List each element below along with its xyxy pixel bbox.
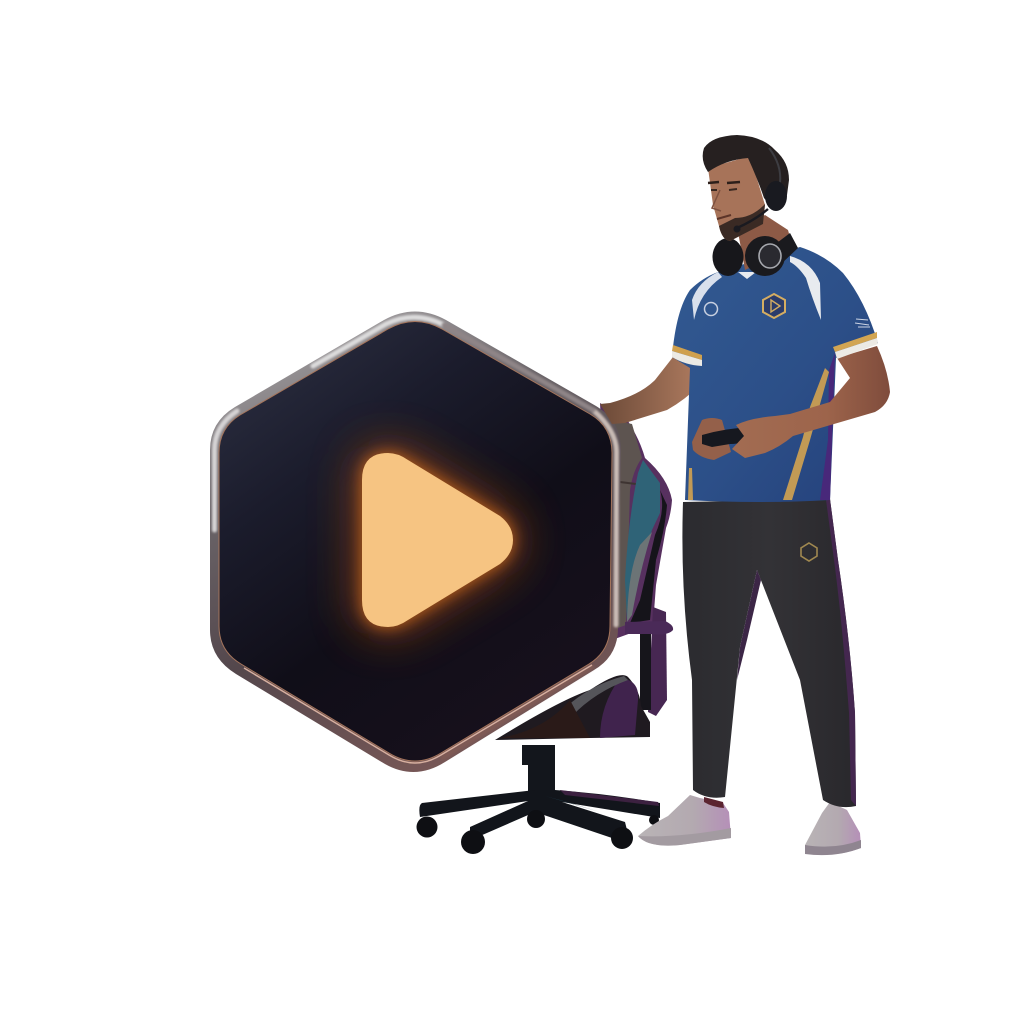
shoulder stripes xyxy=(790,256,821,320)
badge rim xyxy=(210,312,621,772)
neck headphones xyxy=(712,233,798,276)
chair base xyxy=(419,790,660,838)
copper lower edge xyxy=(244,665,592,763)
play glow xyxy=(362,453,513,627)
controller xyxy=(702,427,756,447)
chair arm support xyxy=(640,634,651,710)
chair wheels xyxy=(416,810,659,854)
badge play xyxy=(771,300,780,312)
face xyxy=(708,156,765,241)
gamer xyxy=(600,135,890,855)
back arm xyxy=(600,357,702,424)
shoes xyxy=(638,795,861,855)
badge face xyxy=(219,322,612,761)
trousers xyxy=(682,499,856,807)
rim highlights xyxy=(214,317,616,758)
trouser logo xyxy=(801,543,817,561)
chair back xyxy=(600,403,672,640)
collar V xyxy=(738,272,756,279)
play triangle xyxy=(362,453,513,627)
trouser inner leg stripe xyxy=(737,570,761,680)
front arm xyxy=(732,346,890,458)
shirt xyxy=(672,247,878,502)
chair seat xyxy=(495,675,650,740)
nose shade xyxy=(712,190,721,211)
beard xyxy=(719,204,765,241)
trouser side stripe xyxy=(826,499,856,806)
head headset xyxy=(734,148,787,232)
hair xyxy=(703,135,789,205)
sleeve bands xyxy=(672,345,702,360)
chair rear column xyxy=(648,607,667,716)
shirt side shade xyxy=(820,353,835,500)
brow and eye xyxy=(708,182,740,183)
sleeve print xyxy=(855,319,870,327)
neck xyxy=(738,215,793,270)
right sleeve bands xyxy=(833,332,877,352)
mouth xyxy=(717,215,731,219)
shirt badge xyxy=(763,294,785,318)
office chair xyxy=(416,403,673,854)
hexagon play badge xyxy=(210,312,621,772)
chair armrest xyxy=(625,621,673,634)
gold side stripes xyxy=(783,368,829,500)
left hand xyxy=(692,418,731,460)
shirt small crest xyxy=(704,302,718,316)
chair stem xyxy=(522,745,555,794)
